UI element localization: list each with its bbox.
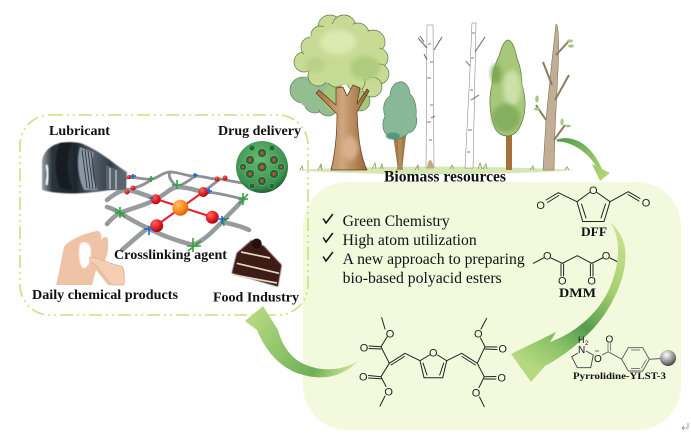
molecule: catalyst Pyrrolidine-YLST-3: 2	[585, 341, 589, 347]
molecule: furan product: O	[472, 387, 481, 399]
molecule: catalyst Pyrrolidine-YLST-3: H	[578, 335, 584, 345]
tree: bare tree	[534, 24, 574, 170]
label: DMM: DMM	[559, 285, 596, 300]
molecule: furan product: O	[474, 328, 483, 340]
benefit text: A new approach to preparing	[343, 251, 525, 268]
label: Lubricant: Lubricant	[49, 123, 111, 138]
molecule: furan product: O	[497, 373, 506, 385]
tree: cypress	[490, 40, 525, 170]
molecule: furan product: O	[360, 342, 369, 354]
check marks	[324, 214, 332, 261]
molecule: catalyst Pyrrolidine-YLST-3: O	[606, 334, 614, 346]
label: Daily chemical products: Daily chemical products	[32, 287, 178, 302]
molecule: furan product: O	[384, 387, 393, 399]
molecule: DMM	[533, 251, 621, 300]
arrow: large green reaction arrow	[511, 221, 626, 382]
molecule: furan product: O	[498, 343, 507, 355]
molecule: catalyst Pyrrolidine-YLST-3	[572, 334, 676, 382]
benefit text: High atom utilization	[343, 232, 477, 249]
red junction balls	[124, 175, 228, 232]
orange centre ball	[172, 200, 188, 216]
network: crosslinked polymer	[107, 172, 249, 252]
label: Food Industry: Food Industry	[213, 290, 299, 304]
panel: green process background	[303, 182, 681, 430]
red crosslink bonds	[156, 192, 212, 225]
molecule: furan product: O	[386, 328, 395, 340]
tree: birch one	[418, 25, 442, 168]
front grey polymer strands	[107, 187, 249, 250]
label: catalyst name: Pyrrolidine-YLST-3	[573, 372, 666, 382]
arrow: trees to DFF	[557, 138, 610, 181]
back grey polymer strands	[127, 172, 243, 199]
molecule: furan product: O	[429, 348, 438, 360]
molecule: DMM: O	[587, 276, 596, 288]
photo: hand with cream	[56, 231, 125, 285]
molecule: DMM: O	[602, 251, 611, 263]
label: Crosslinking agent: Crosslinking agent	[114, 247, 228, 262]
benefit text: Green Chemistry	[343, 213, 450, 230]
molecule: furan product: O	[359, 372, 368, 384]
molecule: furan product	[359, 318, 507, 407]
molecule: DFF: O	[536, 200, 545, 212]
arrow: product to applications	[245, 306, 358, 377]
illustration: biomass trees	[290, 15, 575, 174]
panel: applications dashed frame	[20, 115, 308, 315]
green and blue crosslinks	[115, 176, 248, 252]
label: Drug delivery: Drug delivery	[218, 123, 301, 138]
molecule: DMM: O	[543, 251, 552, 263]
list: advantages	[324, 213, 525, 287]
benefit text	[343, 213, 525, 287]
photo: drug delivery sphere	[236, 141, 288, 193]
molecule: DFF	[536, 185, 651, 239]
label: DFF: DFF	[581, 224, 607, 239]
heading: biomass resources: Biomass resources	[384, 169, 506, 186]
molecule: DMM: O	[558, 276, 567, 288]
molecule: catalyst Pyrrolidine-YLST-3: N	[578, 345, 585, 356]
molecule: catalyst Pyrrolidine-YLST-3: O	[594, 354, 602, 365]
photo: chocolate cake	[232, 238, 282, 287]
icon: return mark	[682, 423, 688, 430]
grass strip	[296, 163, 575, 174]
tree: large oak	[290, 15, 389, 170]
tree: birch two	[465, 23, 485, 168]
molecule: DFF: O	[642, 198, 651, 210]
molecule: DFF: O	[589, 185, 598, 197]
photo: gear lubricant	[42, 142, 127, 193]
tree: small teal	[383, 82, 417, 170]
benefit text: bio-based polyacid esters	[343, 270, 502, 287]
